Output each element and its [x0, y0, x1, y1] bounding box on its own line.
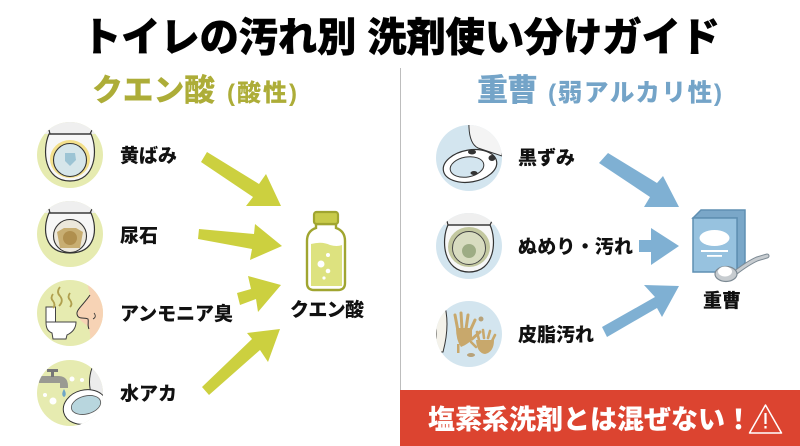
icon: urine stone toilet — [37, 199, 103, 267]
arrow: slime to baking soda — [639, 228, 679, 265]
heading: citric acid: クエン酸 — [92, 73, 215, 108]
icon: citric acid bottle — [307, 212, 345, 290]
heading: citric acid — [92, 73, 297, 108]
arrow: black stain to baking soda — [599, 153, 679, 207]
icon: ammonia smell — [37, 278, 105, 346]
icon: black stain toilet — [436, 120, 502, 191]
label: yellowing: 黄ばみ — [120, 145, 177, 167]
arrow: yellowing to citric acid — [201, 152, 281, 206]
label: ammonia smell: アンモニア臭 — [120, 302, 233, 325]
arrow: urine stone to citric acid — [198, 224, 282, 260]
icon: water scale — [37, 360, 103, 426]
warning banner: 塩素系洗剤とは混ぜない！ — [428, 405, 752, 435]
arrow: water scale to citric acid — [202, 329, 280, 395]
icon: yellowing toilet — [37, 120, 103, 188]
label: baking soda: 重曹 — [703, 289, 741, 312]
icon: warning triangle — [750, 405, 782, 433]
title: トイレの汚れ別 洗剤使い分けガイド — [82, 16, 720, 60]
icon: sebum hand prints — [436, 300, 502, 367]
icon: baking soda box — [693, 210, 767, 282]
heading: baking soda: (弱アルカリ性) — [548, 79, 722, 107]
label: urine stone: 尿石 — [120, 225, 158, 247]
icon: slime toilet — [436, 210, 502, 279]
label: black stain: 黒ずみ — [518, 146, 575, 169]
label: water scale: 水アカ — [120, 383, 177, 405]
label: citric acid: クエン酸 — [290, 298, 364, 321]
warning banner — [400, 390, 800, 446]
heading: baking soda — [477, 73, 722, 108]
heading: baking soda: 重曹 — [477, 73, 538, 108]
label: sebum stain: 皮脂汚れ — [518, 323, 594, 346]
arrow: sebum to baking soda — [602, 285, 679, 337]
arrow: ammonia to citric acid — [237, 276, 281, 312]
heading: citric acid: (酸性) — [227, 80, 297, 107]
label: slime and dirt: ぬめり・汚れ — [518, 236, 633, 258]
